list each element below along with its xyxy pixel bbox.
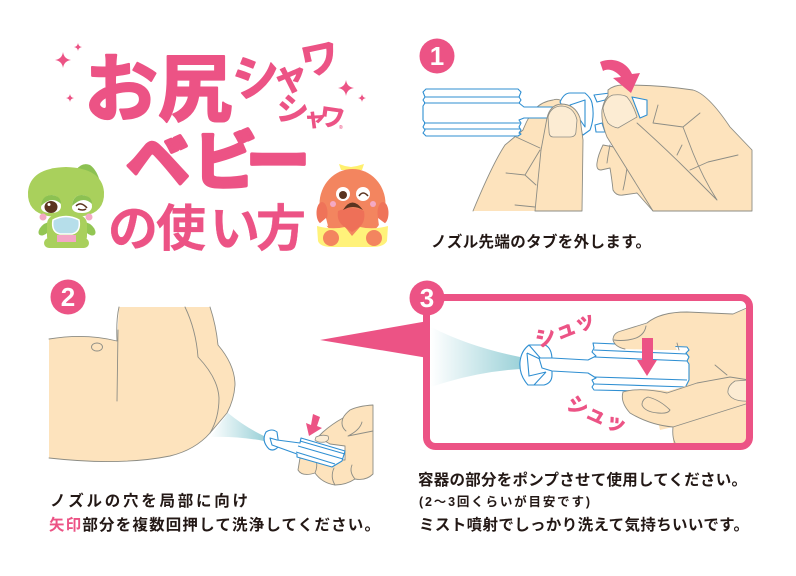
small press arrow [306, 414, 322, 436]
title: シャワ small [274, 90, 346, 134]
step 3 panel [320, 280, 750, 446]
step 2 caption: 矢印部分を複数回押して洗浄してください。 [49, 515, 380, 534]
left hand back [473, 99, 583, 211]
step 1 badge [420, 38, 454, 74]
right hand [597, 85, 752, 211]
spray mist [431, 327, 520, 387]
step 3 caption [418, 471, 749, 534]
title: シャワ large [228, 36, 343, 109]
step 3 caption: 容器の部分をポンプさせて使用してください。 [418, 471, 747, 489]
curved arrow [600, 60, 640, 93]
nozzle container [423, 89, 610, 136]
step 3 badge [410, 280, 444, 316]
zoom callout pointer [320, 321, 428, 358]
title line: お尻: お尻 [84, 48, 232, 131]
nozzle [520, 343, 689, 392]
press arrow [637, 338, 657, 376]
step 3 caption: (2～3回くらいが目安です) [419, 494, 590, 509]
title: シャワ small: ワ [318, 102, 346, 134]
sound text: シュッ top: シュッ [532, 308, 599, 352]
sparkles [55, 43, 366, 102]
left thumb [535, 104, 583, 211]
spray mist [210, 413, 264, 441]
step 1 illustration [420, 38, 752, 211]
title line: ベビー: ベビー [126, 126, 310, 198]
title: シャワ small: シ [274, 90, 311, 130]
hand fingers over nozzle [613, 307, 749, 443]
step 3 badge: 3 [420, 283, 434, 313]
step 1 caption: ノズル先端のタブを外します。 [431, 232, 651, 251]
title: シャワ large: シ [228, 47, 286, 109]
step 2 illustration [49, 280, 373, 485]
sound text: シュッ bottom: シュッ [563, 392, 630, 438]
step 2 badge: 2 [61, 282, 75, 312]
title: シャワ large: ャ [269, 53, 312, 101]
title: シャワ small: ャ [302, 105, 328, 132]
small hand with nozzle [264, 405, 373, 485]
title: シャワ large: ワ [298, 36, 343, 85]
title: シャワ small: ® [339, 124, 343, 131]
step 2 badge [50, 280, 86, 314]
step 2 caption [49, 491, 380, 534]
title line: の使い方: の使い方 [108, 201, 306, 257]
title [55, 36, 366, 257]
step 3 caption: ミスト噴射でしっかり洗えて気持ちいいです。 [419, 515, 749, 534]
character: green kappa mascot [28, 164, 104, 248]
hand behind nozzle [640, 308, 749, 446]
baby body [49, 307, 235, 462]
step 1 badge: 1 [430, 41, 444, 71]
panel border [426, 298, 750, 446]
character: orange mascot in yellow diaper [316, 164, 388, 247]
step 2 caption: ノズルの穴を局部に向け [50, 491, 248, 510]
